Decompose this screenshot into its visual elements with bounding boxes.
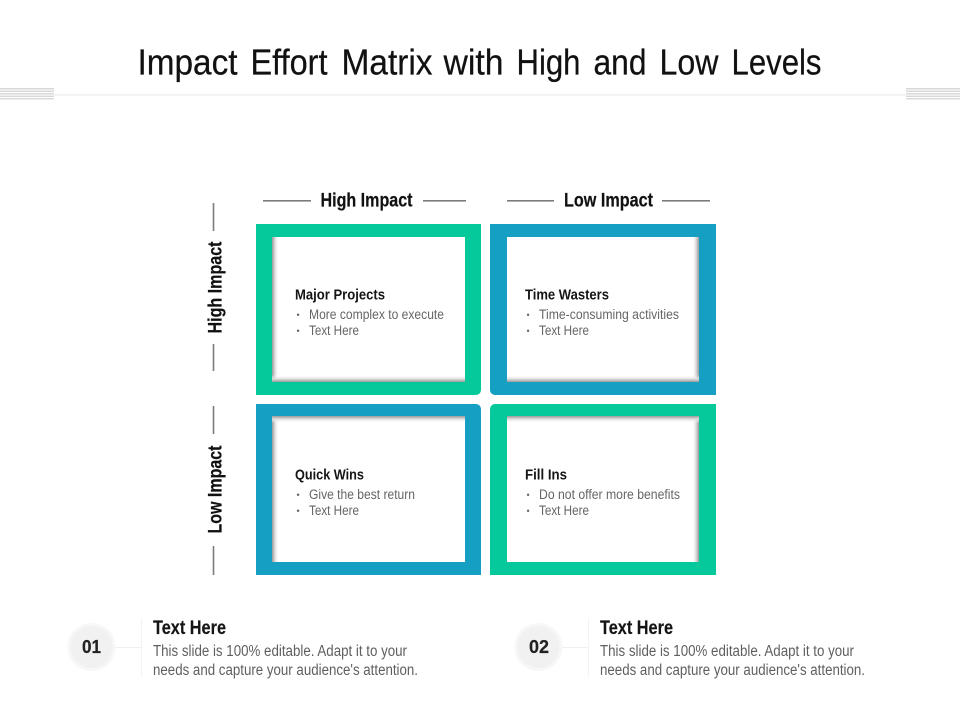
callout text 01: Text Here xyxy=(153,618,226,639)
bullet list: Fill Ins: Do not offer more benefits xyxy=(539,487,680,502)
bullet list: Major Projects: Text Here xyxy=(309,323,359,338)
badge 02 xyxy=(514,623,562,671)
title: Levels xyxy=(732,42,822,82)
callout text 01: needs and capture your audience's attention. xyxy=(153,662,418,679)
bullet list: Quick Wins: • xyxy=(296,506,300,516)
badge 01 xyxy=(68,623,116,671)
row heading: High Impact: High Impact xyxy=(206,241,226,334)
bullet list: Major Projects: More complex to execute xyxy=(309,307,444,322)
title: and xyxy=(594,42,646,82)
bullet list: Time Wasters: • xyxy=(526,326,530,336)
callout text 01 xyxy=(153,618,418,679)
bullet list: Time Wasters: • xyxy=(526,310,530,320)
panel: Time Wasters xyxy=(490,224,716,395)
title: Low xyxy=(660,42,719,82)
header rule xyxy=(0,88,960,100)
column heading: Low Impact: Low Impact xyxy=(564,190,654,212)
callout 01 xyxy=(68,618,418,679)
heading: Major Projects: Major Projects xyxy=(295,286,385,304)
bullet list: Quick Wins xyxy=(296,487,415,518)
bullet list: Time Wasters: Text Here xyxy=(539,323,589,338)
callout text 02: Text Here xyxy=(600,618,673,639)
title: Matrix xyxy=(342,42,432,82)
title: High xyxy=(516,42,580,82)
column heading: High Impact: High Impact xyxy=(320,190,413,212)
callout text 02: needs and capture your audience's attention. xyxy=(600,662,865,679)
bullet list: Major Projects: • xyxy=(296,310,300,320)
badge 01: 01 xyxy=(82,637,101,657)
bullet list: Quick Wins: Give the best return xyxy=(309,487,415,502)
heading: Quick Wins: Quick Wins xyxy=(295,466,364,484)
row heading: Low Impact: Low Impact xyxy=(206,445,226,534)
callout text 02 xyxy=(600,618,865,679)
bullet list: Major Projects xyxy=(296,307,444,338)
bullet list: Major Projects: • xyxy=(296,326,300,336)
title: Impact xyxy=(138,42,238,82)
title: Effort xyxy=(250,42,328,82)
bullet list: Time Wasters xyxy=(526,307,679,338)
callout text 01: This slide is 100% editable. Adapt it to your xyxy=(153,643,407,660)
bullet list: Quick Wins: Text Here xyxy=(309,503,359,518)
panel: Fill Ins xyxy=(490,404,716,575)
callout text 02: This slide is 100% editable. Adapt it to your xyxy=(600,643,854,660)
bullet list: Time Wasters: Time-consuming activities xyxy=(539,307,679,322)
bullet list: Fill Ins: Text Here xyxy=(539,503,589,518)
heading: Fill Ins: Fill Ins xyxy=(525,466,567,484)
heading: Time Wasters: Time Wasters xyxy=(525,286,609,304)
callout 02 xyxy=(514,618,865,679)
title xyxy=(138,42,822,82)
bullet list: Quick Wins: • xyxy=(296,490,300,500)
panel: Quick Wins xyxy=(256,404,481,575)
badge 02: 02 xyxy=(529,637,549,657)
bullet list: Fill Ins xyxy=(526,487,680,518)
title: with xyxy=(443,42,504,82)
panel: Major Projects xyxy=(256,224,481,395)
bullet list: Fill Ins: • xyxy=(526,506,530,516)
bullet list: Fill Ins: • xyxy=(526,490,530,500)
